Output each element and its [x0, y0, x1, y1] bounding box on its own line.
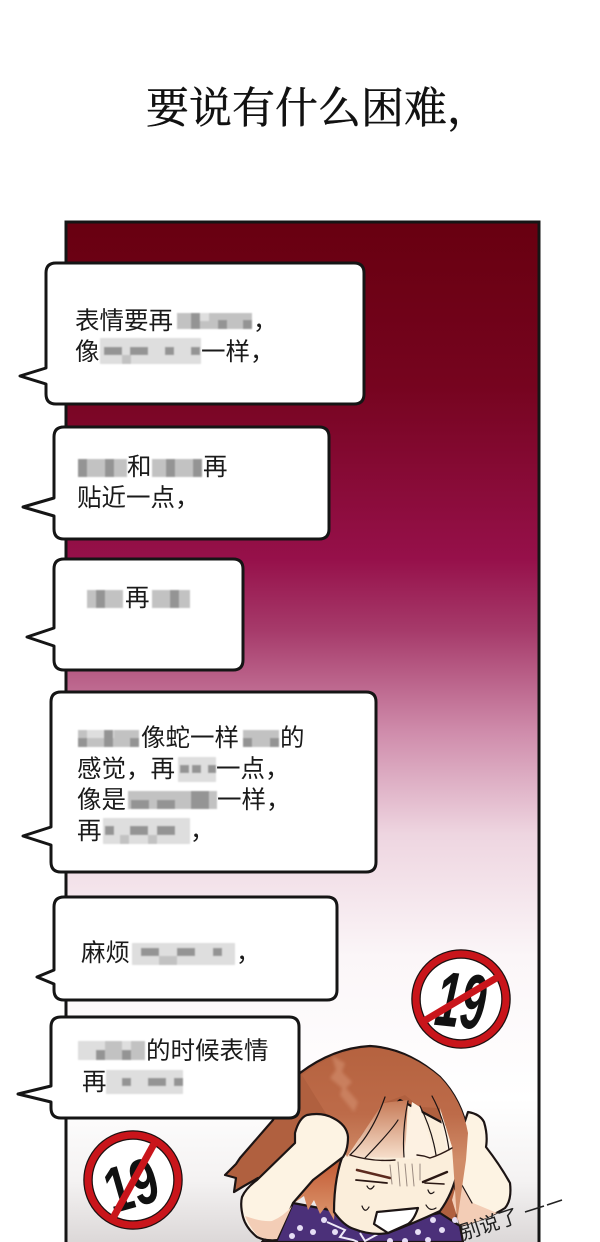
speech bubble 4: 像蛇一样 — [141, 719, 239, 754]
forehead sliver — [440, 1108, 452, 1153]
arm crease — [458, 1178, 472, 1203]
pajamas — [262, 1203, 463, 1242]
speech bubble 4: 的 — [280, 719, 304, 754]
hair strand beside face — [294, 1160, 338, 1220]
right arm — [452, 1112, 510, 1226]
eyes and brows — [350, 1148, 452, 1186]
face — [334, 1100, 458, 1234]
speech bubble 1: 一样， — [201, 333, 274, 368]
speech bubble 2: 再 — [203, 448, 228, 483]
panel: gradient background — [66, 222, 539, 1242]
speech bubble 5: 麻烦 — [81, 934, 130, 969]
bang strands — [350, 1096, 449, 1158]
speech bubble 1: ， — [253, 302, 278, 337]
speech bubble 1: 像 — [75, 333, 100, 368]
right arm shading — [452, 1178, 497, 1226]
speech bubble 4: 一点， — [216, 750, 290, 785]
title: 要说有什么困难， — [146, 75, 490, 136]
speech bubble 1 — [20, 263, 364, 404]
no-19 sign: upper right: 19 — [431, 955, 491, 1047]
no-19 sign: upper right — [416, 954, 506, 1047]
speech bubble 2: 贴近一点， — [77, 479, 200, 514]
caption dashes — [525, 1200, 562, 1212]
speech bubble 4 — [23, 692, 376, 872]
forehead highlight — [403, 1102, 435, 1160]
speech bubble 3 — [27, 559, 243, 670]
speech bubble 6 — [18, 1017, 299, 1118]
speech bubble 5 — [37, 897, 337, 1000]
no-19 sign: lower left: 19 — [96, 1145, 167, 1228]
speech bubble 4: 像是 — [77, 781, 126, 816]
speech bubble 1: 表情要再 — [75, 302, 173, 337]
hair back — [225, 1046, 469, 1222]
fringe — [302, 1048, 468, 1222]
mouth — [374, 1208, 418, 1233]
speech bubble 2 — [23, 427, 329, 539]
left arm — [241, 1114, 348, 1240]
speech bubble 3: 再 — [125, 579, 150, 614]
character: girl covering her ears — [225, 1046, 510, 1242]
hair highlight — [330, 1056, 358, 1112]
speech bubble 4: 再 — [77, 812, 102, 847]
bangs shading — [347, 1100, 408, 1158]
speech bubble 4: 感觉，再 — [77, 750, 175, 785]
speech bubble 6: 再 — [82, 1063, 106, 1098]
left arm shading — [245, 1206, 292, 1239]
speech bubble 2: 和 — [127, 448, 152, 483]
sweat drops — [362, 1186, 436, 1210]
speech bubble 4: ， — [190, 812, 214, 847]
speech bubble 6: 的时候表情 — [146, 1032, 268, 1067]
speech bubble 5: ， — [236, 934, 260, 969]
speech bubble 4: 一样， — [217, 781, 290, 816]
